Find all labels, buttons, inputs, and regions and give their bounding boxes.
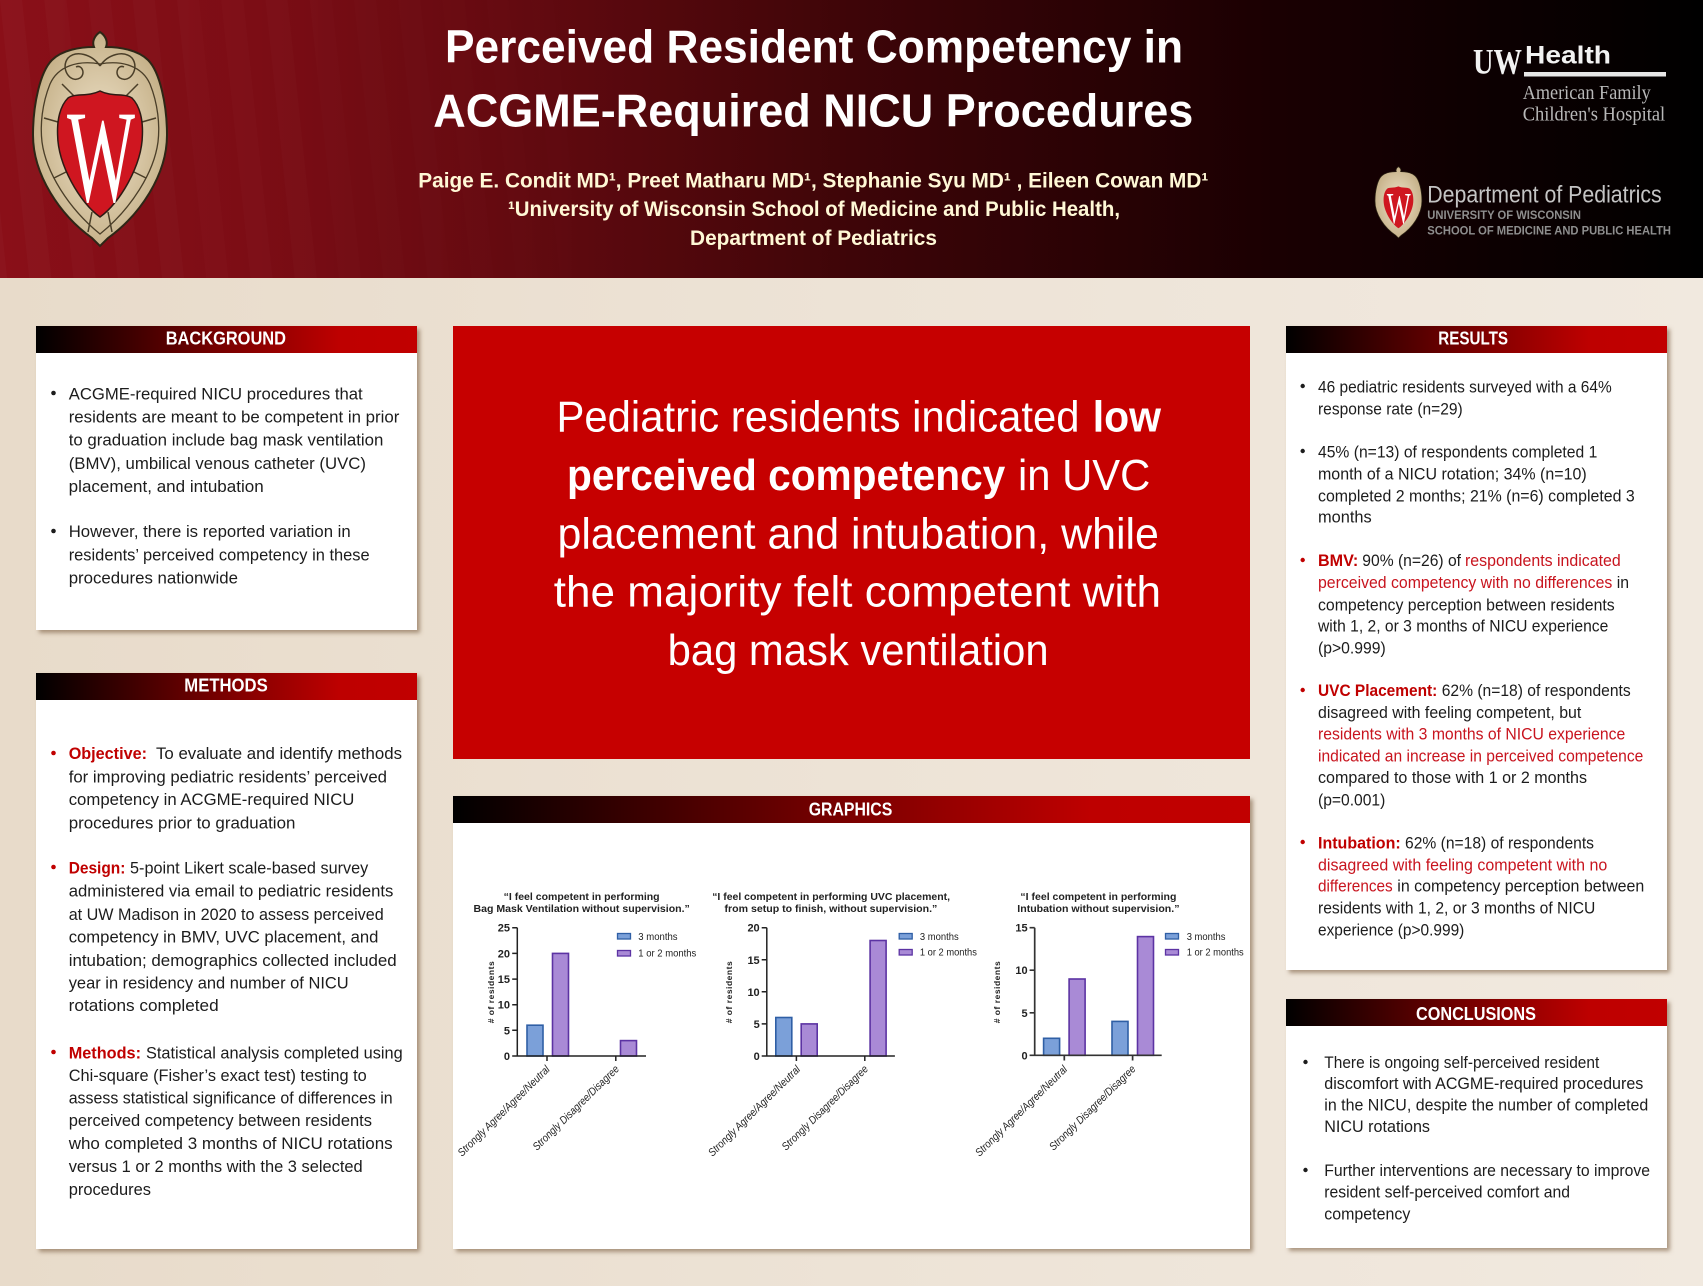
bar chart: bag mask ventilation: 20 [498, 948, 510, 960]
text block: methods statistics: procedures [69, 1180, 151, 1199]
panel: background [36, 326, 417, 630]
bar chart: bag mask ventilation: 3 months [638, 931, 678, 943]
text block: UVC placement result: UVC Placement: [1318, 682, 1437, 700]
bar chart: UVC placement [706, 891, 977, 1159]
text block: methods statistics: who completed 3 months of NICU rotations [68, 1134, 393, 1153]
authors and affiliation: Paige E. Condit MD¹, Preet Matharu MD¹, Stephanie Syu MD¹ , Eileen Cowan MD¹ [418, 170, 1208, 193]
icon: UW crest: W [67, 83, 135, 230]
bar chart: intubation: 5 [1021, 1008, 1028, 1020]
text block: background first bullet [51, 384, 400, 496]
authors and affiliation: ¹University of Wisconsin School of Medicine and Public Health, [508, 198, 1120, 221]
text block: BMV result: in [1617, 574, 1629, 592]
bar chart: UVC placement: 15 [747, 955, 760, 967]
logo: UW Health American Family Children's Hospital: Health [1525, 41, 1611, 69]
bar chart: bag mask ventilation: 10 [498, 1000, 510, 1012]
bar chart: UVC placement: # of residents [724, 961, 734, 1023]
text block: intubation result: disagreed with feeling competent with no [1318, 856, 1607, 874]
authors and affiliation: Department of Pediatrics [690, 227, 937, 250]
text block: design: year in residency and number of NICU [69, 973, 349, 992]
text block: background first bullet: ACGME-required NICU procedures that [69, 384, 363, 403]
text block: background first bullet: to graduation include bag mask ventilation [69, 431, 383, 450]
text block: background first bullet: residents are meant to be competent in prior [69, 408, 400, 427]
bar chart: intubation: 15 [1015, 923, 1028, 935]
panel: key finding callout: perceived competency [567, 451, 1006, 500]
text block: survey response: response rate (n=29) [1318, 400, 1463, 418]
bar chart: bag mask ventilation: 15 [498, 974, 510, 986]
bar chart: bag mask ventilation: Strongly Agree/Agree/Neutral [456, 1063, 553, 1159]
text block: conclusions second bullet: Further interventions are necessary to improve [1324, 1162, 1650, 1180]
bar chart: UVC placement: from setup to finish, without supervision.” [724, 903, 937, 915]
heading: conclusions: CONCLUSIONS [1416, 1004, 1536, 1024]
text block: BMV result: respondents indicated [1465, 552, 1621, 570]
text block: conclusions first bullet: in the NICU, despite the number of completed [1324, 1097, 1648, 1115]
bar chart: bag mask ventilation: Strongly Disagree/Disagree [531, 1063, 622, 1153]
bar chart: bag mask ventilation: 25 [498, 923, 510, 935]
icon: UW crest [33, 32, 167, 246]
logo: UW Health American Family Children's Hospital: Children's Hospital [1523, 104, 1666, 126]
bar chart: UVC placement: Strongly Agree/Agree/Neutral [706, 1063, 803, 1159]
title: Perceived Resident Competency in [445, 21, 1183, 73]
text block: BMV result [1300, 552, 1629, 658]
text block: design: administered via email to pediatric residents [69, 882, 393, 901]
text block: background first bullet: placement, and intubation [69, 477, 264, 496]
bar chart: bag mask ventilation: 5 [504, 1025, 510, 1037]
text block: BMV result: 90% (n=26) of [1362, 552, 1461, 570]
bar chart: UVC placement: Strongly Disagree/Disagree [780, 1063, 871, 1153]
panel: results [1286, 326, 1667, 970]
bar chart: intubation: Strongly Agree/Agree/Neutral [973, 1063, 1070, 1159]
text block: methods statistics: Chi-square (Fisher’s exact test) testing to [69, 1066, 367, 1085]
text block: BMV result: with 1, 2, or 3 months of NICU experience [1317, 618, 1608, 636]
logo: Department of Pediatrics [1375, 167, 1671, 238]
panel: key finding callout: bag mask ventilation [668, 626, 1049, 675]
bar chart: UVC placement: 10 [747, 987, 760, 999]
text block: intubation result: Intubation: [1318, 834, 1401, 852]
text block: methods statistics: assess statistical significance of differences in [69, 1088, 393, 1107]
logo: UW Health American Family Children's Hospital: American Family [1523, 82, 1651, 104]
text block: NICU rotation counts: 45% (n=13) of respondents completed 1 [1318, 443, 1597, 461]
logo: UW Health American Family Children's Hospital: UW [1473, 42, 1522, 82]
text block: NICU rotation counts: month of a NICU rotation; 34% (n=10) [1318, 465, 1587, 483]
text block: intubation result: in competency perception between [1397, 878, 1644, 896]
panel: key finding callout: low [1093, 393, 1162, 442]
text block: design: rotations completed [69, 996, 219, 1015]
text block: conclusions first bullet: NICU rotations [1324, 1118, 1430, 1136]
panel: key finding callout [453, 326, 1250, 759]
text block: UVC placement result: indicated an increase in perceived competence [1318, 748, 1643, 766]
text block: conclusions second bullet: competency [1324, 1205, 1411, 1223]
text block: methods statistics: versus 1 or 2 months with the 3 selected [69, 1157, 363, 1176]
text block: NICU rotation counts: months [1318, 508, 1372, 526]
bar chart: UVC placement: “I feel competent in performing UVC placement, [712, 891, 950, 903]
bar chart: intubation: Strongly Disagree/Disagree [1047, 1063, 1138, 1153]
bar chart: bag mask ventilation: 0 [504, 1051, 510, 1063]
bar chart: UVC placement: 1 or 2 months [920, 947, 977, 959]
text block: objective [51, 744, 402, 832]
panel: methods [36, 673, 417, 1249]
heading: background: BACKGROUND [166, 328, 286, 348]
text block: objective: To evaluate and identify methods [156, 744, 402, 763]
logo: Department of Pediatrics: SCHOOL OF MEDICINE AND PUBLIC HEALTH [1427, 225, 1671, 237]
bar chart: bag mask ventilation: # of residents [486, 961, 496, 1023]
bar chart: intubation: “I feel competent in performing [1020, 891, 1176, 903]
logo: UW Health American Family Children's Hospital [1473, 41, 1666, 126]
text block: design: Design: [69, 859, 125, 878]
authors and affiliation [418, 170, 1208, 250]
bar chart: intubation: 3 months [1187, 931, 1226, 943]
text block: BMV result: (p>0.999) [1318, 640, 1386, 658]
text block: conclusions first bullet: discomfort with ACGME-required procedures [1324, 1075, 1643, 1093]
text block: intubation result: residents with 1, 2, or 3 months of NICU [1318, 900, 1595, 918]
panel: key finding callout: in UVC [1018, 451, 1150, 500]
text block: survey response: 46 pediatric residents surveyed with a 64% [1318, 378, 1612, 396]
text block: BMV result: perceived competency with no differences [1318, 574, 1612, 592]
title: ACGME-Required NICU Procedures [433, 85, 1193, 137]
text block: intubation result: differences [1318, 878, 1393, 896]
heading: methods: METHODS [184, 676, 268, 696]
logo: Department of Pediatrics: W [1387, 184, 1411, 233]
panel: conclusions [1286, 999, 1667, 1248]
logo: Department of Pediatrics: UNIVERSITY OF WISCONSIN [1427, 210, 1581, 222]
bar chart: UVC placement: 5 [754, 1019, 760, 1031]
text block: background second bullet: residents’ perceived competency in these [69, 545, 370, 564]
text block: objective: Objective: [69, 744, 147, 763]
bar chart: intubation: # of residents [992, 961, 1002, 1023]
text block: survey response [1300, 378, 1612, 418]
text block: BMV result: competency perception between residents [1318, 596, 1615, 614]
text block: objective: procedures prior to graduation [69, 813, 295, 832]
bar chart: bag mask ventilation: “I feel competent in performing [504, 891, 660, 903]
text block: design [51, 859, 397, 1015]
bar chart: intubation: 10 [1015, 965, 1028, 977]
text block: conclusions second bullet [1303, 1162, 1650, 1223]
text block: design: competency in BMV, UVC placement, and [69, 928, 378, 947]
text block: design: 5-point Likert scale-based survey [130, 859, 369, 878]
text block: design: intubation; demographics collected included [69, 951, 397, 970]
bar chart: intubation: 1 or 2 months [1187, 947, 1244, 959]
bar chart: bag mask ventilation [456, 891, 696, 1159]
text block: UVC placement result: residents with 3 months of NICU experience [1318, 726, 1625, 744]
panel: graphics [453, 796, 1250, 1249]
text block: background second bullet [51, 522, 370, 587]
heading: results: RESULTS [1438, 328, 1508, 348]
bar chart: UVC placement: 3 months [920, 931, 959, 943]
text block: UVC placement result: 62% (n=18) of respondents [1442, 682, 1631, 700]
text block: intubation result [1300, 834, 1644, 940]
text block: background second bullet: procedures nationwide [69, 568, 238, 587]
panel: key finding callout: placement and intubation, while [558, 509, 1159, 558]
panel: key finding callout: Pediatric residents indicated [556, 393, 1080, 442]
bar chart: intubation [973, 891, 1244, 1159]
header banner [0, 0, 1703, 278]
text block: UVC placement result: disagreed with feeling competent, but [1318, 704, 1582, 722]
bar chart: UVC placement: 20 [747, 923, 760, 935]
text block: UVC placement result [1300, 682, 1643, 809]
text block: conclusions second bullet: resident self-perceived comfort and [1324, 1183, 1570, 1201]
bar chart: intubation: Intubation without supervision.” [1017, 903, 1180, 915]
text block: design: at UW Madison in 2020 to assess perceived [69, 905, 384, 924]
bar chart: bag mask ventilation: 1 or 2 months [638, 948, 696, 960]
text block: BMV result: BMV: [1318, 552, 1358, 570]
text block: methods statistics: perceived competency between residents [69, 1111, 372, 1130]
title [433, 21, 1193, 137]
text block: intubation result: experience (p>0.999) [1318, 922, 1464, 940]
bar chart: bag mask ventilation: Bag Mask Ventilation without supervision.” [474, 903, 690, 915]
text block: UVC placement result: compared to those with 1 or 2 months [1318, 769, 1587, 787]
bar chart: intubation: 0 [1021, 1050, 1028, 1062]
panel: key finding callout: the majority felt competent with [554, 568, 1161, 617]
text block: background second bullet: However, there is reported variation in [69, 522, 351, 541]
text block: methods statistics: Statistical analysis completed using [146, 1043, 403, 1062]
text block: intubation result: 62% (n=18) of respondents [1405, 834, 1594, 852]
bar chart: UVC placement: 0 [754, 1051, 760, 1063]
heading: graphics: GRAPHICS [809, 800, 892, 820]
text block: NICU rotation counts [1300, 443, 1635, 526]
logo: Department of Pediatrics: Department of Pediatrics [1427, 182, 1662, 209]
text block: conclusions first bullet [1303, 1054, 1648, 1136]
text block: objective: for improving pediatric residents’ perceived [69, 767, 387, 786]
text block: UVC placement result: (p=0.001) [1318, 791, 1385, 809]
text block: NICU rotation counts: completed 2 months; 21% (n=6) completed 3 [1318, 487, 1635, 505]
text block: methods statistics [51, 1043, 403, 1199]
text block: background first bullet: (BMV), umbilical venous catheter (UVC) [69, 454, 366, 473]
text block: conclusions first bullet: There is ongoing self-perceived resident [1324, 1054, 1600, 1072]
text block: methods statistics: Methods: [69, 1043, 141, 1062]
text block: objective: competency in ACGME-required NICU [69, 790, 354, 809]
